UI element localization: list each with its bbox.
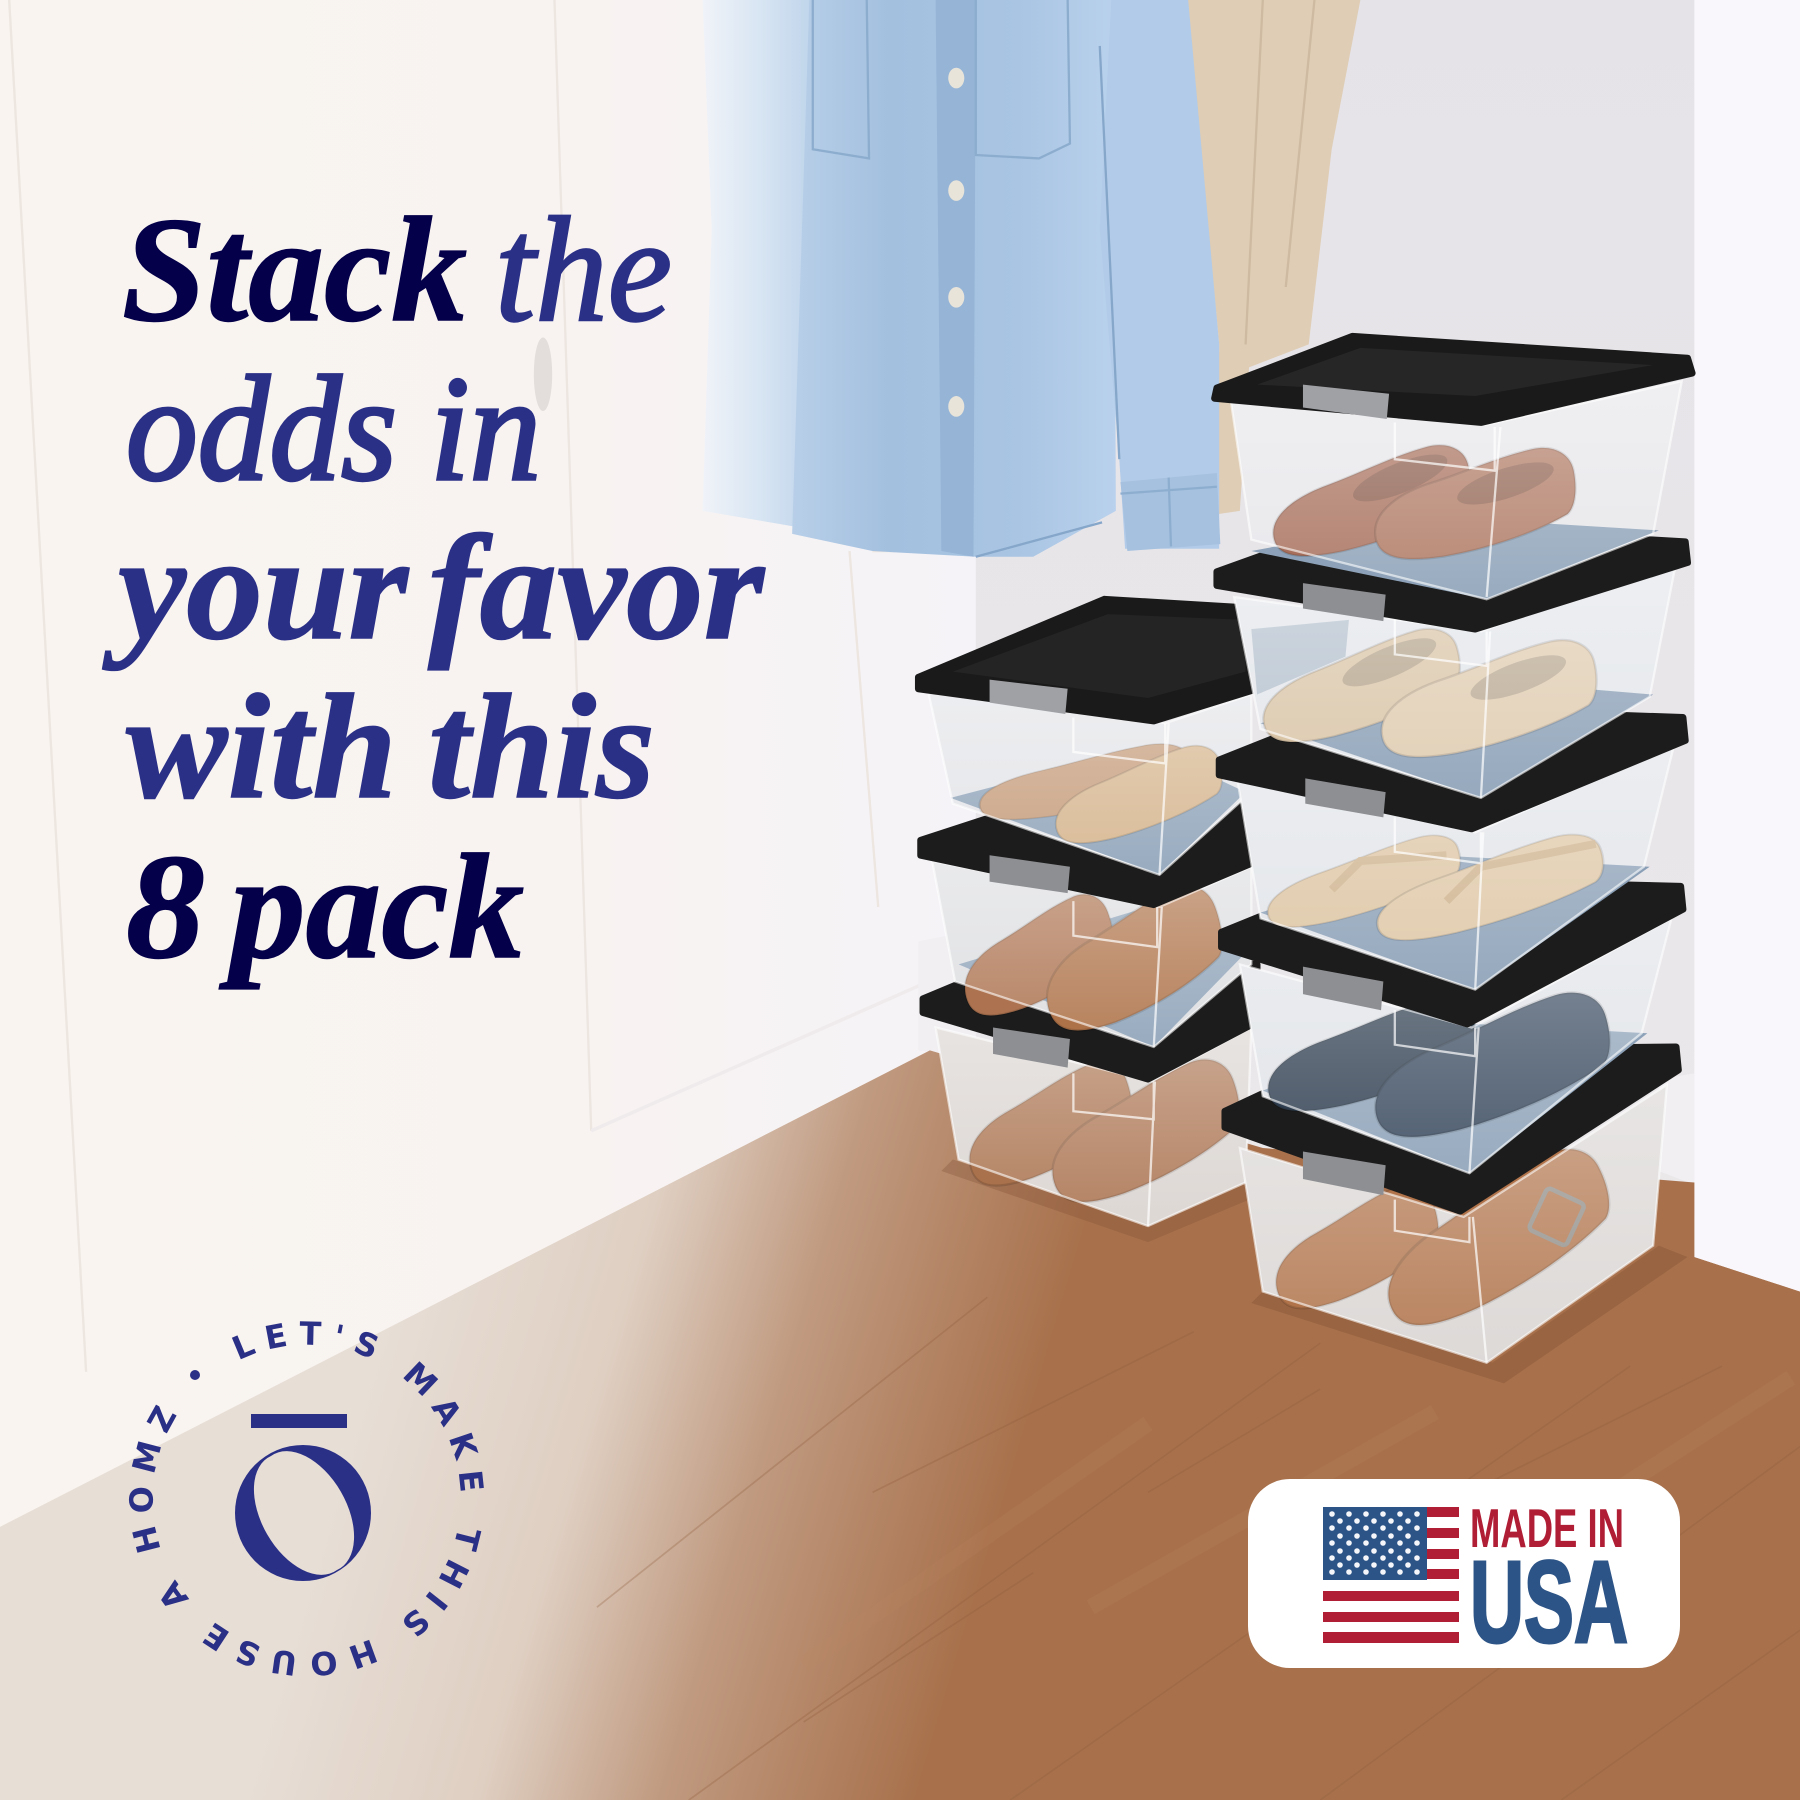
title: Stack the odds in your favor with this 8 pack [102,187,766,990]
box: right stack third, cream flip flops [1219,706,1685,990]
title line 2 [126,346,541,512]
box: right stack fourth, dark navy clogs [1221,878,1683,1173]
baseboard [918,930,1694,1185]
right back wall [976,0,1694,1217]
box: right stack bottom, brown sandals [1225,1047,1678,1363]
beige sweater [1186,0,1360,514]
made in USA badge [1248,1479,1680,1668]
title line 2: in [430,346,541,512]
title line 2: odds [126,346,397,512]
left closet door wall [0,0,987,1607]
title line 1: Stack [122,187,467,353]
circular brand logo [128,1321,484,1676]
logo bar [251,1414,347,1428]
box: left stack middle, tan oxfords [921,804,1257,1047]
blue shirts [703,0,1220,557]
title line 5: pack [219,824,524,990]
title line 4 [126,664,655,830]
title line 4: this [428,664,655,830]
circular slogan text: LET'S MAKE THIS HOUSE A HOMZ [128,1321,484,1676]
title line 5: 8 [126,824,205,990]
MADE IN text: MADE IN [1470,1497,1624,1559]
right door [1694,0,1800,1292]
logo letter o [235,1445,371,1581]
title line 3 [102,505,766,671]
title line 4: with [126,664,397,830]
box: left stack bottom, brown oxfords [923,953,1257,1226]
wood floor [0,1050,1800,1800]
title line 1 [122,187,672,353]
title line 3: favor [428,505,766,671]
badge background [1248,1479,1680,1668]
USA text: USA [1470,1537,1628,1667]
icon: American flag [1323,1507,1459,1643]
title line 3: your [102,505,410,671]
box: left stack top, tan flats [918,599,1257,875]
title line 1: the [495,187,672,353]
box: right stack second, woven espadrilles [1217,522,1688,798]
box: right stack top, terracotta flats [1215,336,1692,599]
